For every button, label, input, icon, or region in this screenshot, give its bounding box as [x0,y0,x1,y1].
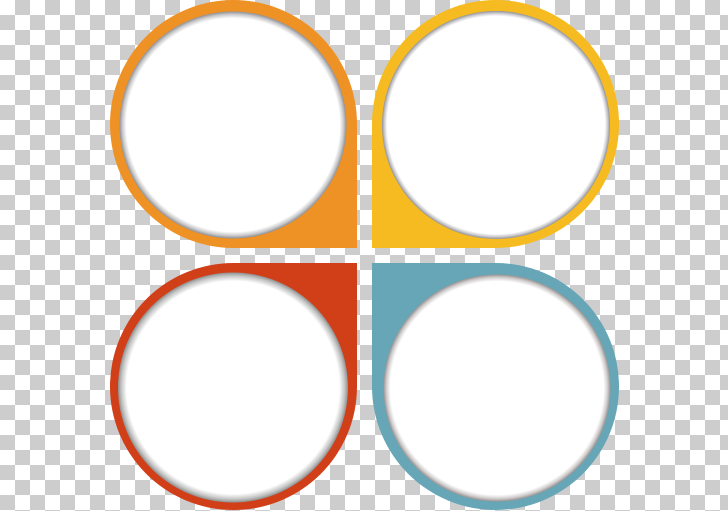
red white circle [118,272,348,502]
teal drop shape [372,263,619,510]
panel: orange circle [110,0,357,248]
yellow white circle [382,11,610,239]
yellow drop shape [372,0,619,248]
red drop shape [110,263,357,510]
panel: red circle [110,263,357,510]
orange white circle [120,12,346,238]
orange drop shape [110,0,357,248]
panel: yellow circle [372,0,619,248]
panel: teal circle [372,263,619,510]
teal white circle [384,274,610,502]
